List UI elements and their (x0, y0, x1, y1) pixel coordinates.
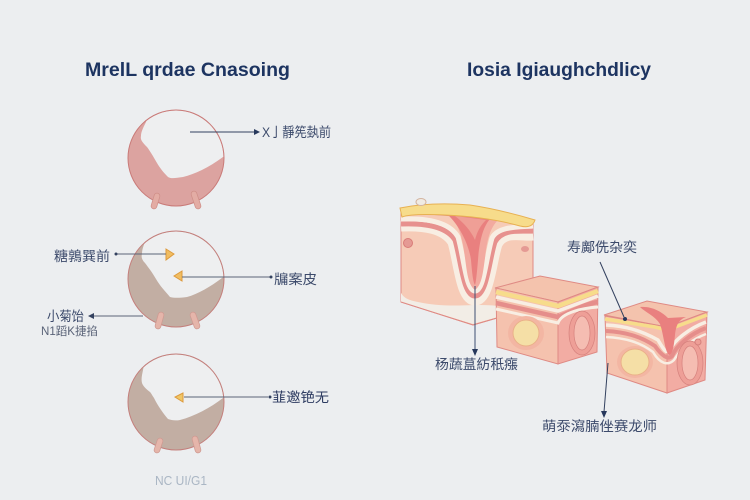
icon: circle diagram 2 (128, 230, 224, 330)
label: circle 2 right: 牖案皮 (274, 271, 317, 287)
diagram: skin block 3 with fold and cyst (604, 301, 707, 393)
marker: orange triangle lower (174, 271, 182, 281)
marker: orange triangle upper (166, 249, 174, 260)
marker: orange triangle circle 3 (175, 393, 183, 402)
arrow and label: fold bottom callout: 杨蔬蒀紡秖瘬 (435, 357, 518, 372)
arrow and label: circle 1 callout: X亅靜筅埶前 (262, 124, 331, 140)
label: circle 2 right (182, 271, 317, 287)
arrow and label: circle 1 callout (190, 124, 331, 140)
arrow and label: lower right callout: 萌沗瀉腩侳赛龙师 (542, 418, 657, 434)
icon: circle diagram 3 (128, 354, 224, 454)
diagram: skin block 1 with deep fold (400, 198, 535, 325)
title: left heading: MrelL qrdae Cnasoing (85, 59, 290, 81)
arrow and label: upper right callout: 寿鄺侁杂奕 (567, 239, 637, 255)
arrow and label: lower right callout (542, 363, 657, 434)
label: circle 2 lower left: N1蹈K捷掐 (41, 324, 98, 338)
fold layers (401, 226, 533, 300)
title: right heading: Iosia Igiaughchdlicy (467, 59, 651, 81)
central red fold (447, 214, 490, 285)
label: circle 2 upper left: 糖鶉巽前 (54, 248, 110, 264)
icon: circle diagram 1 (128, 110, 224, 210)
label: circle 2 lower left: 小菊饴 (47, 309, 84, 324)
label: circle 3 right (184, 390, 329, 405)
diagram: skin block 2 with cyst (495, 276, 598, 364)
label: circle 2 lower left (41, 309, 143, 338)
arrow and label: fold bottom callout (435, 286, 518, 372)
yellow top layer (400, 204, 535, 227)
label: circle 3 right: 韮邀铯无 (272, 390, 329, 405)
arrow and label: upper right callout (567, 239, 637, 321)
caption: bottom left: NC UI/G1 (155, 473, 207, 488)
label: circle 2 upper left (54, 248, 166, 264)
